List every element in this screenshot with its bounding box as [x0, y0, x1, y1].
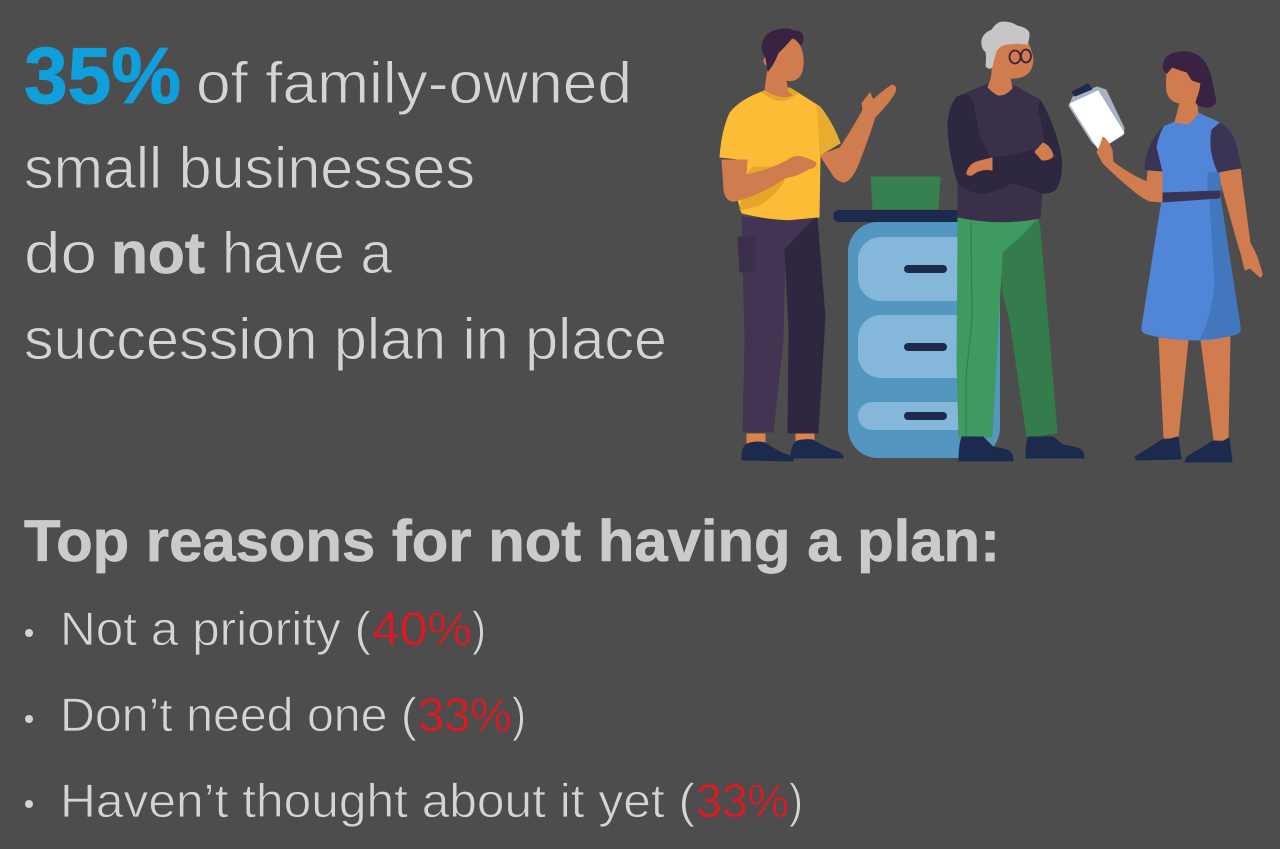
headline line 3: do [24, 221, 97, 286]
icon: clipboard [1069, 84, 1124, 150]
reason 2: 33% [418, 688, 512, 741]
reason 1: Not a priority ( [60, 602, 371, 655]
headline line 3 [24, 221, 393, 286]
headline statistic [24, 31, 667, 372]
headline line 3: have a [222, 221, 393, 286]
illustration: three people at a filing cabinet [720, 22, 1262, 462]
reason 1: ) [472, 602, 486, 655]
reason 1: 40% [372, 602, 472, 655]
filing cabinet [833, 177, 1000, 458]
person: woman with clipboard [1069, 52, 1262, 462]
person: older man with glasses [948, 22, 1084, 461]
icon: glasses [1010, 50, 1031, 64]
reason 1 [25, 602, 486, 655]
section heading: Top reasons for not having a plan: [24, 509, 1000, 574]
headline line 1: of family-owned [196, 51, 632, 116]
headline line 2: small businesses [24, 136, 475, 201]
reason 3: ) [789, 774, 803, 827]
reason 2: Don’t need one ( [60, 688, 417, 741]
reasons list [25, 602, 803, 827]
reason 2 [25, 688, 526, 741]
headline line 3: not [111, 221, 205, 286]
reason 3: 33% [696, 774, 789, 827]
reason 3: Haven’t thought about it yet ( [60, 774, 695, 827]
stat: 35%: 35% [24, 31, 181, 120]
person: man in yellow shirt [720, 29, 896, 461]
headline line 4: succession plan in place [24, 307, 667, 372]
reason 2: ) [512, 688, 526, 741]
